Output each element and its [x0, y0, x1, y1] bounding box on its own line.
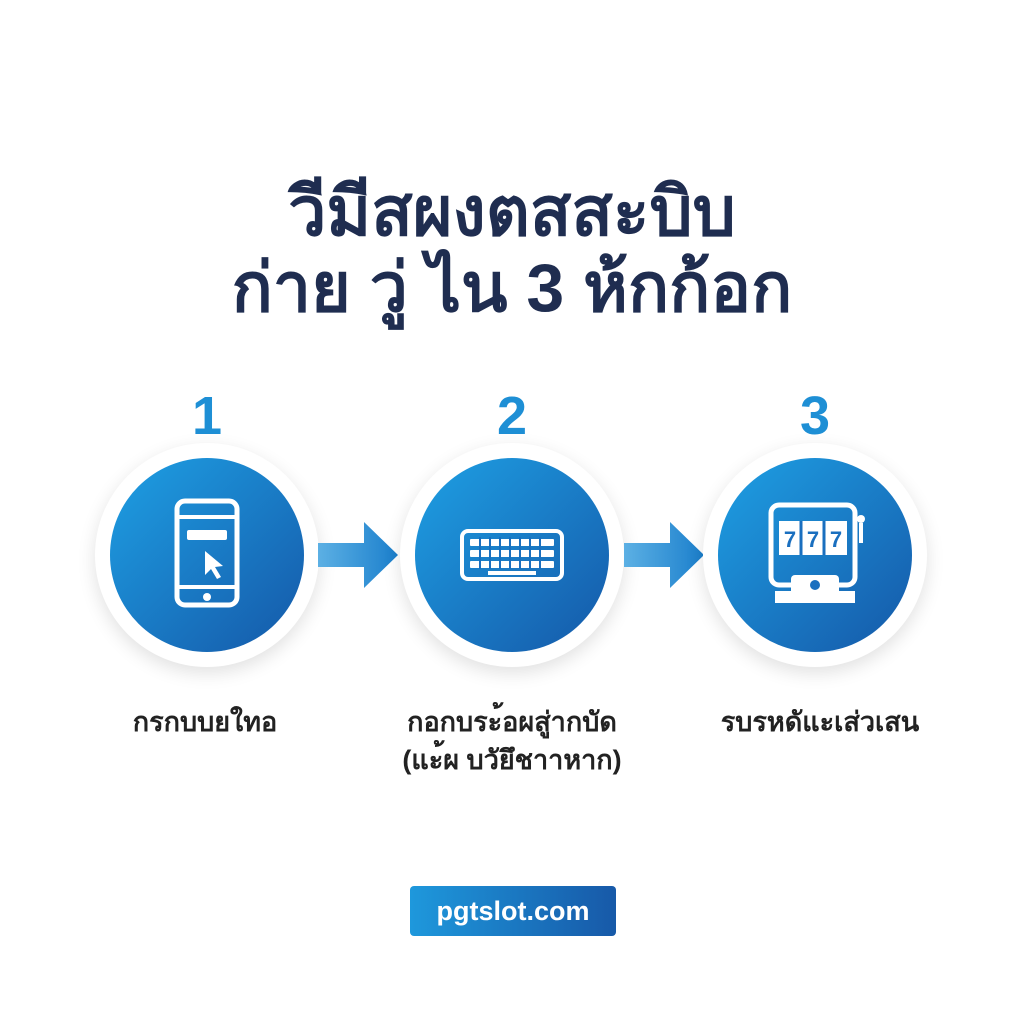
website button: pgtslot.com	[436, 896, 590, 926]
step 1 circle: phone icon	[95, 443, 319, 667]
arrow 2	[624, 522, 703, 588]
number 3: 3	[800, 386, 830, 446]
title: ก่าย วู่ ไน 3 ห้กก้อก	[232, 250, 792, 326]
number 1: 1	[192, 386, 222, 446]
step 3 circle: slot machine icon: 7	[784, 527, 796, 552]
label 2	[402, 702, 622, 775]
title	[232, 174, 792, 330]
number 2: 2	[497, 386, 527, 446]
label 2: กอกบระ้อผสู่ากบัด	[407, 707, 617, 737]
title: วีมีสผงตสสะบิบ	[288, 174, 736, 250]
label 1: กรกบบยใทอ	[133, 707, 277, 737]
label 2: (แะ้ผ บวัยึชาาหาก)	[402, 745, 622, 775]
step 3 circle: slot machine icon	[703, 443, 927, 667]
step 3 circle: slot machine icon: 7	[807, 527, 819, 552]
arrow 1	[318, 522, 398, 588]
label 3: รบรหดัแะเส่วเสน	[721, 707, 919, 737]
step 3 circle: slot machine icon: 7	[830, 527, 842, 552]
website button	[410, 886, 616, 936]
step 2 circle: keyboard icon	[400, 443, 624, 667]
